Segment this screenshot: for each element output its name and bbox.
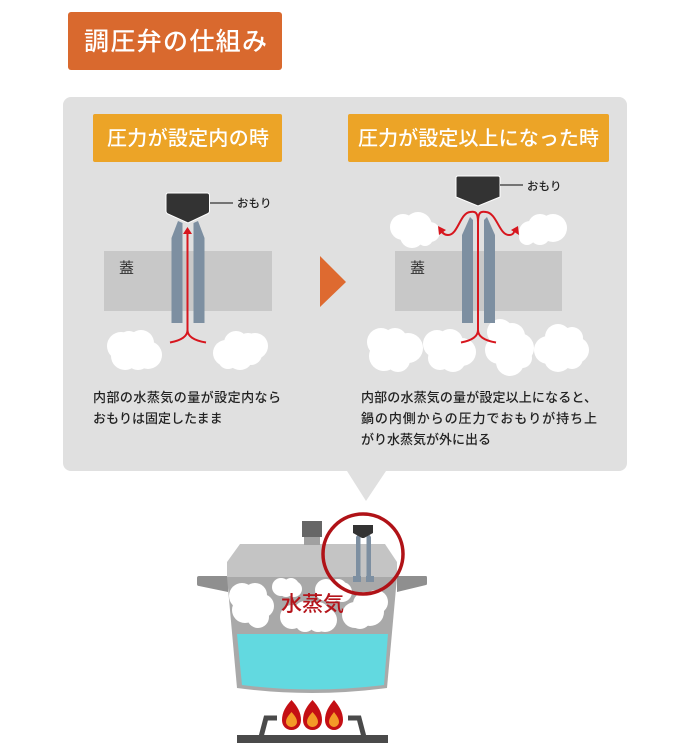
burner trivet bbox=[237, 718, 388, 743]
flames bbox=[282, 700, 343, 730]
valve pipes bbox=[172, 221, 204, 323]
weight bbox=[456, 176, 500, 206]
text: within set pressure: 内部の水蒸気の量が設定内なら bbox=[93, 390, 281, 405]
illustration: pressure cooker on stove bbox=[197, 514, 427, 743]
steam arrow bbox=[170, 227, 206, 342]
pressure release knob bbox=[302, 521, 322, 545]
arrow: transition bbox=[320, 256, 346, 307]
steam arrow bbox=[438, 212, 519, 342]
weight label: おもり bbox=[237, 197, 272, 210]
text: above set pressure: 鍋の内側からの圧力でおもりが持ち上 bbox=[361, 411, 597, 426]
diagram: open valve bbox=[367, 176, 589, 376]
text: above set pressure: がり水蒸気が外に出る bbox=[361, 432, 491, 447]
pot body bbox=[227, 577, 397, 693]
heading: within set pressure: 圧力が設定内の時 bbox=[107, 127, 269, 150]
heading: above set pressure bbox=[348, 114, 609, 162]
panel: valve comparison bbox=[63, 97, 627, 501]
lid bbox=[395, 251, 562, 311]
pot handles bbox=[197, 576, 427, 592]
title bbox=[68, 12, 282, 70]
text: within set pressure: おもりは固定したまま bbox=[93, 411, 223, 426]
heading: within set pressure bbox=[93, 114, 282, 162]
lid bbox=[104, 251, 272, 311]
heading: above set pressure: 圧力が設定以上になった時 bbox=[358, 127, 599, 150]
label: lid: 蓋 bbox=[119, 260, 134, 277]
steam clouds bbox=[107, 330, 268, 370]
weight label bbox=[500, 180, 562, 193]
label: steam: 水蒸気 bbox=[281, 593, 344, 616]
weight label bbox=[210, 197, 272, 210]
diagram: closed valve bbox=[104, 193, 272, 370]
label: lid: 蓋 bbox=[410, 260, 425, 277]
weight bbox=[166, 193, 210, 223]
text: above set pressure: 内部の水蒸気の量が設定以上になると、 bbox=[361, 390, 597, 405]
steam clouds bbox=[229, 578, 388, 632]
pot lid bbox=[227, 544, 397, 577]
water bbox=[237, 634, 388, 690]
weight label: おもり bbox=[527, 180, 562, 193]
highlight circle bbox=[323, 514, 403, 594]
valve pipes bbox=[462, 217, 495, 323]
steam clouds bbox=[367, 212, 589, 376]
miniature valve bbox=[353, 525, 374, 582]
title: 調圧弁の仕組み bbox=[84, 28, 267, 56]
